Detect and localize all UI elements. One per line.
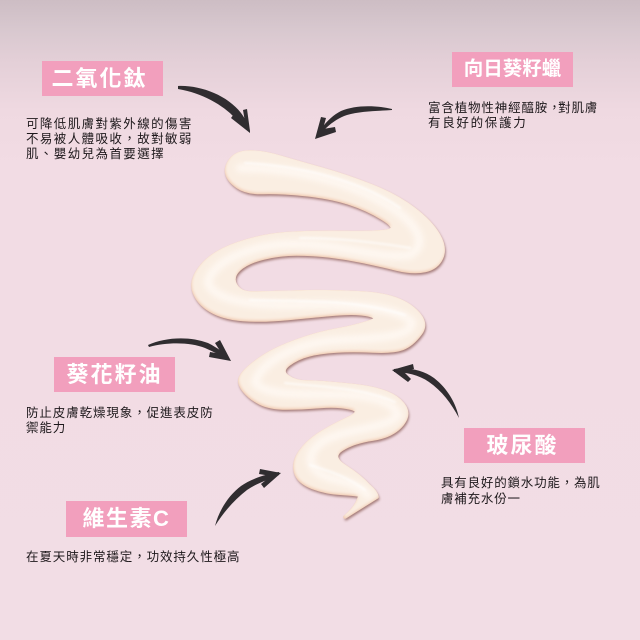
text: titanium dioxide description (26, 117, 193, 161)
label: 玻尿酸: 玻尿酸 (486, 433, 558, 458)
text: sunflower seed oil description (26, 406, 214, 435)
text: sunflower seed wax description (428, 101, 598, 130)
label: 向日葵籽蠟 (452, 52, 573, 87)
text: sunflower seed oil description: 防止皮膚乾燥現象，促進表皮防 (26, 406, 214, 420)
label: 向日葵籽蠟: 向日葵籽蠟 (464, 58, 561, 80)
label: 葵花籽油 (54, 357, 175, 392)
text: titanium dioxide description: 不易被人體吸收，故對敏弱 (26, 132, 193, 146)
text: sunflower seed oil description: 禦能力 (26, 421, 66, 435)
label: 二氧化鈦 (42, 61, 163, 96)
text: hyaluronic acid description: 膚補充水份一 (441, 492, 521, 506)
text: vitamin C description: 在夏天時非常穩定，功效持久性極高 (26, 550, 240, 564)
text: titanium dioxide description: 可降低肌膚對紫外線的傷害 (26, 117, 193, 131)
label: 葵花籽油: 葵花籽油 (66, 362, 162, 387)
text: sunflower seed wax description: 有良好的保護力 (428, 116, 527, 130)
label: 二氧化鈦: 二氧化鈦 (51, 66, 148, 91)
cream swirl illustration (190, 150, 448, 522)
text: hyaluronic acid description: 具有良好的鎖水功能，為肌 (441, 476, 601, 490)
label: 玻尿酸 (464, 428, 585, 463)
label: 維生素C (66, 501, 187, 537)
text: sunflower seed wax description: 富含植物性神經醯胺，對肌膚 (428, 101, 598, 115)
text: titanium dioxide description: 肌、嬰幼兒為首要選擇 (26, 147, 165, 161)
text: hyaluronic acid description (441, 476, 601, 506)
label: 維生素C: 維生素C (83, 506, 170, 531)
